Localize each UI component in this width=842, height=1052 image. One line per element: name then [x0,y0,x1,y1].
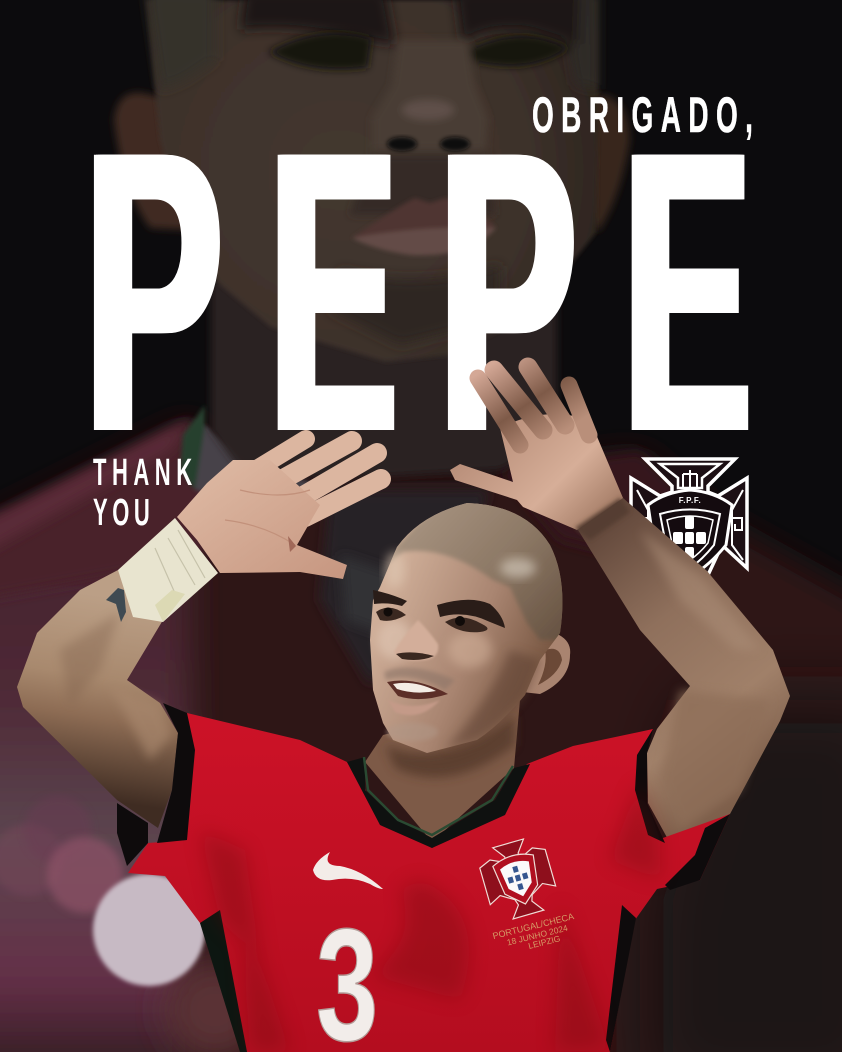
black sleeve cuff left [157,703,195,843]
big brows and eye sockets [240,0,395,45]
chin stubble [386,723,438,741]
crest label F.P.F.: F.P.F. [679,496,701,505]
ear [522,633,570,694]
ears [114,93,630,232]
neck [211,280,557,480]
face shape [146,0,598,362]
jersey match text: LEIPZIG [527,933,561,951]
wrist bandage [118,518,218,622]
side panels [200,910,247,1052]
left hand [177,439,381,579]
text: THANK: THANK [93,451,198,494]
lips [352,198,496,255]
arm tattoo [106,588,126,622]
under nose stubble [350,155,495,215]
jersey match text: 18 JUNHO 2024 [506,923,569,947]
cheek highlight [377,620,413,660]
title: PEPE: E [265,68,391,515]
title: PEPE: P [434,68,573,515]
text: YOU: YOU [93,491,154,534]
eyebrows [373,590,407,606]
mouth [387,680,448,699]
title: PEPE: E [619,68,745,515]
eyes [376,608,406,621]
player [17,367,790,1052]
bokeh light spot [93,874,205,986]
icon: white FPF crest [631,459,747,577]
jersey crest [475,834,561,924]
heading: OBRIGADO,: OBRIGADO, [532,86,760,143]
right arm [575,498,790,843]
nose [372,40,488,150]
jersey swoosh [313,852,383,889]
red jersey [117,703,730,1052]
background jersey shoulders [0,420,690,685]
moustache shade [384,668,455,690]
collar [347,757,530,848]
jersey folds [200,780,660,1052]
neck [365,700,520,842]
head [370,495,575,753]
jersey match text: PORTUGAL/CHECA [492,911,575,941]
black sleeve cuff right [635,729,665,843]
right hand [450,367,630,540]
nose [394,620,438,661]
left arm [17,570,178,828]
title: PEPE [80,68,748,515]
title: PEPE: P [80,68,219,515]
shaved hair [391,503,562,640]
background collar [180,405,330,500]
background face [114,0,630,480]
